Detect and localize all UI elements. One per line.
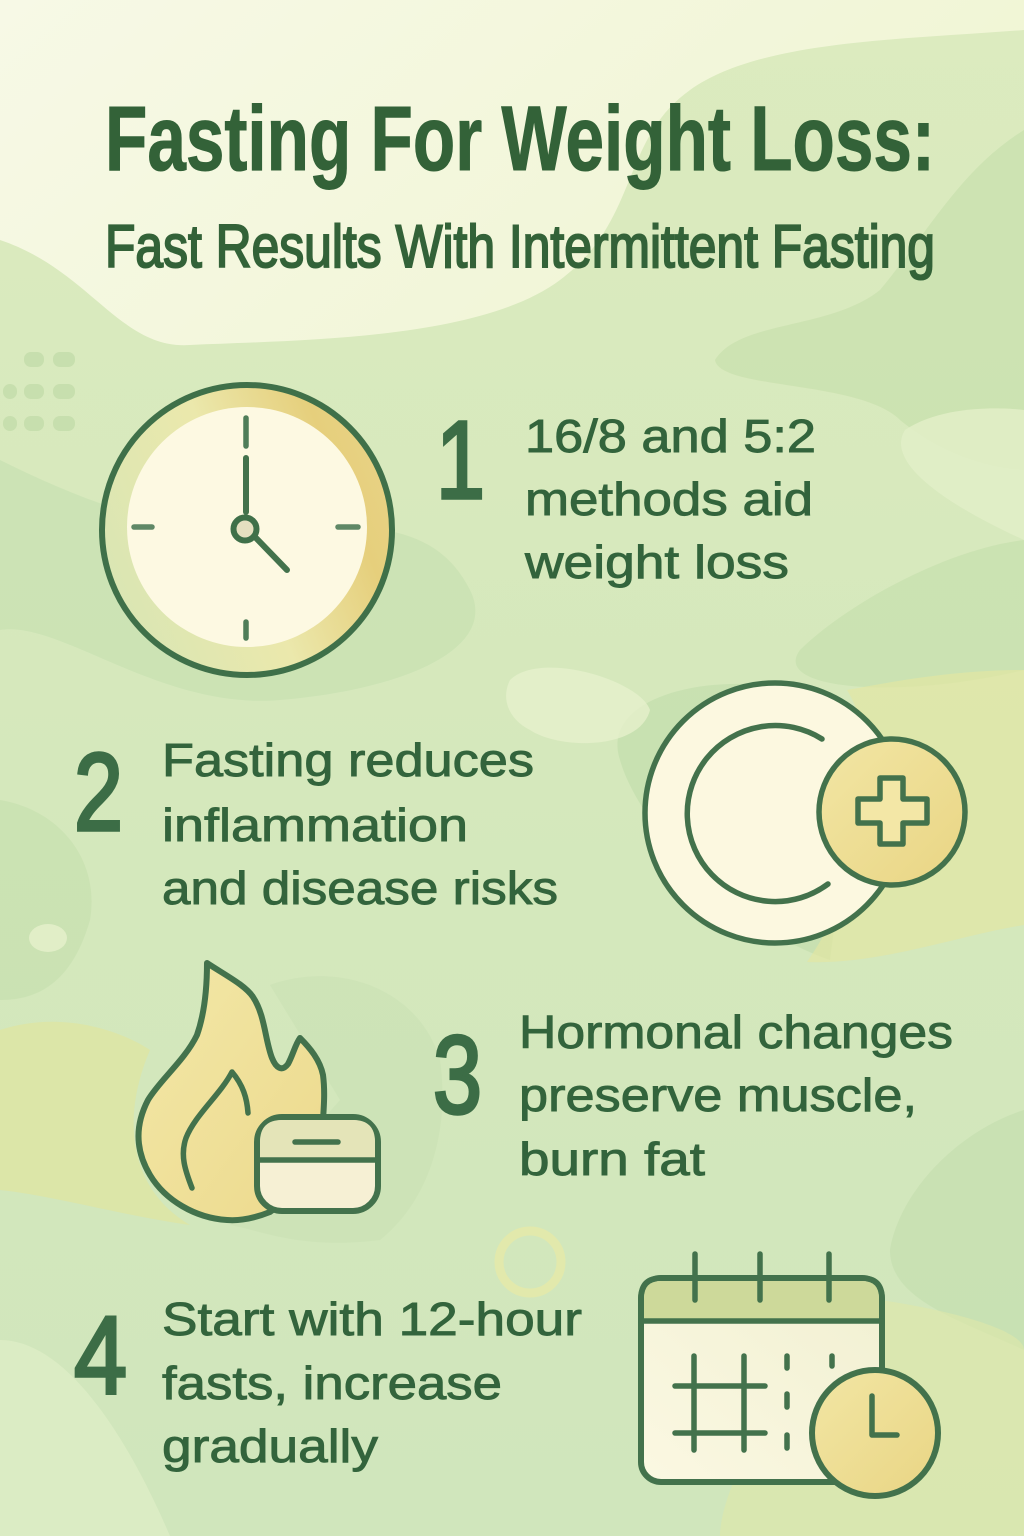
item 1 text: methods aid	[525, 473, 813, 525]
item 4 number: 4	[74, 1294, 127, 1417]
item 2 text	[162, 734, 558, 914]
item 2 text: and disease risks	[162, 862, 558, 914]
item 2 text: Fasting reduces	[162, 734, 534, 786]
item 3 text: burn fat	[519, 1133, 705, 1185]
item 4 text: fasts, increase	[162, 1357, 502, 1409]
item 4 text: gradually	[162, 1420, 378, 1472]
item 1 text	[524, 410, 816, 588]
icon: plate with plus badge	[645, 683, 965, 943]
item 3 number: 3	[433, 1014, 482, 1137]
item 1 text: 16/8 and 5:2	[525, 410, 816, 462]
icon: clock	[102, 385, 392, 675]
item 3 text: preserve muscle,	[519, 1069, 917, 1121]
item 4 text: Start with 12-hour	[162, 1293, 582, 1345]
icon: flame with container	[138, 963, 378, 1220]
item 1 text: weight loss	[524, 536, 789, 588]
item 3 text	[519, 1006, 953, 1185]
item 1 number: 1	[436, 399, 485, 522]
item 2 number: 2	[74, 731, 123, 854]
icon: calendar with clock	[641, 1254, 938, 1496]
item 3 text: Hormonal changes	[519, 1006, 953, 1058]
item 4 text	[162, 1293, 582, 1472]
item 2 text: inflammation	[162, 799, 468, 851]
